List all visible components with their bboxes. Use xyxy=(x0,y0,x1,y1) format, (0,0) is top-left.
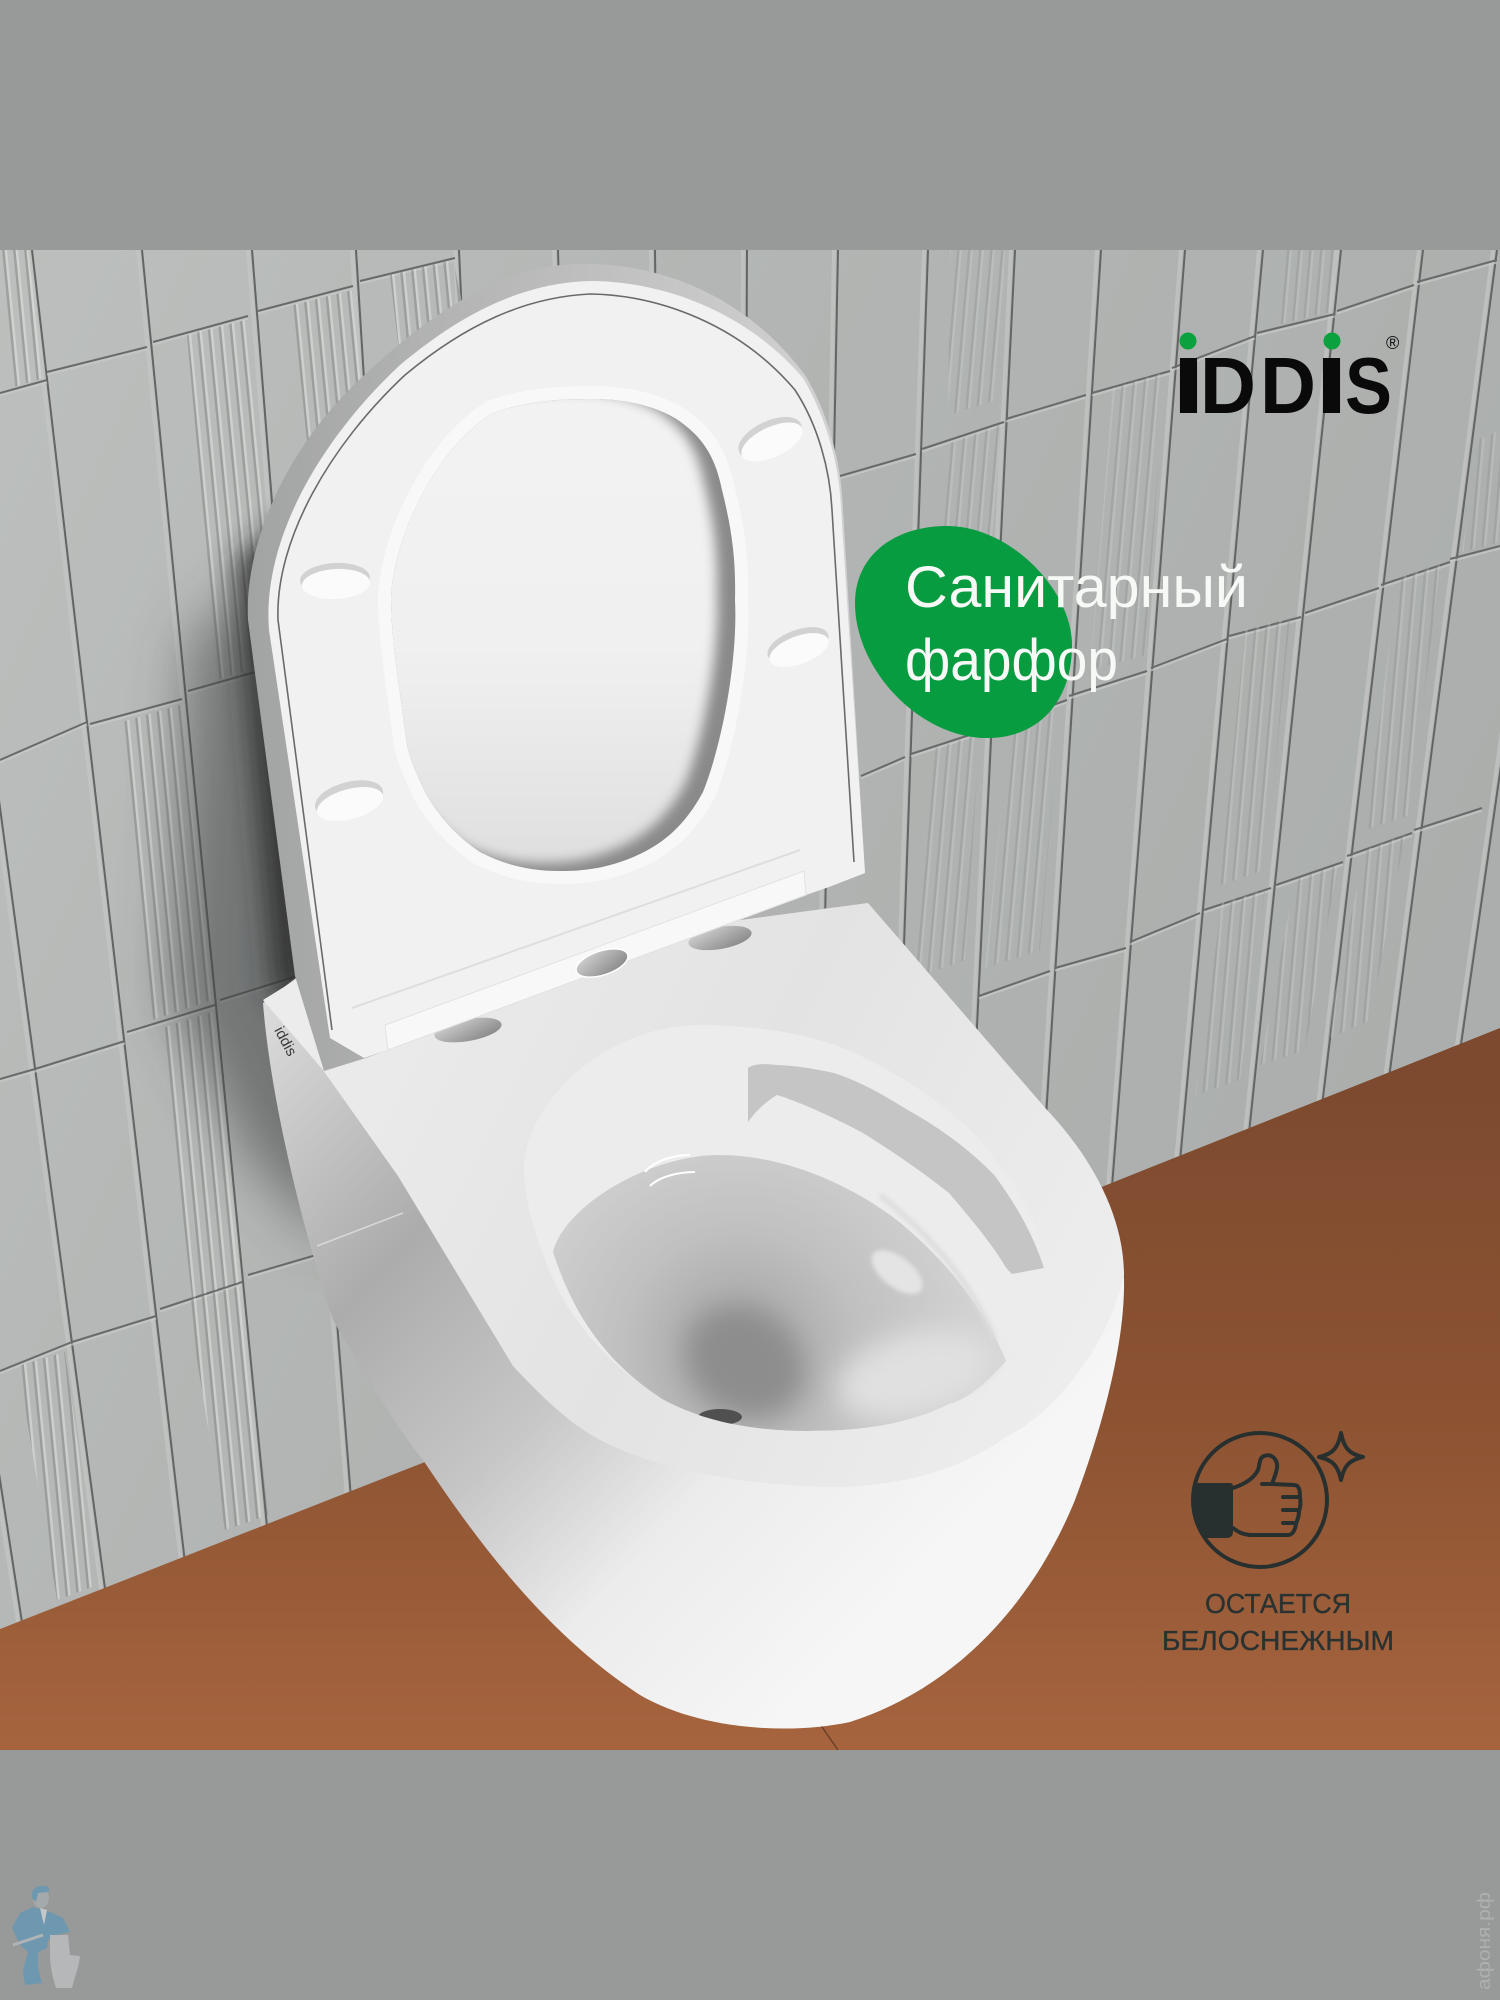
bumper lower left xyxy=(315,780,383,821)
lid recess edge xyxy=(352,850,800,1008)
chrome fixing post right xyxy=(688,926,752,950)
iddis mark on block: iddis xyxy=(270,1024,300,1059)
lid shadow on wall xyxy=(170,510,350,1250)
rinse ledge xyxy=(748,1064,1044,1274)
bumper top right xyxy=(738,417,802,462)
icon caption: БЕЛОСНЕЖНЫМ xyxy=(1162,1625,1394,1656)
watermark: site name: афоня.рф xyxy=(1474,1892,1494,1990)
product photo scene xyxy=(0,250,1500,1750)
icon: thumbs up with sparkle xyxy=(1190,1433,1363,1567)
inner basin xyxy=(553,1155,1006,1431)
floor xyxy=(0,1028,1500,1750)
lid outer shell xyxy=(248,264,865,1071)
icon caption xyxy=(1162,1588,1394,1656)
callout heading xyxy=(905,555,1248,693)
bottom grey band xyxy=(0,1750,1500,2000)
callout heading: Санитарный xyxy=(905,555,1248,620)
body side surface xyxy=(263,903,1124,1729)
toilet bowl body xyxy=(263,903,1124,1729)
callout heading: фарфор xyxy=(905,628,1118,693)
hinge strip xyxy=(385,871,806,1050)
top grey band xyxy=(0,0,1500,250)
icon caption: ОСТАЕТСЯ xyxy=(1205,1588,1351,1619)
seat opening xyxy=(391,399,736,871)
IDDIS logo: D xyxy=(1260,341,1316,430)
IDDIS logo: I xyxy=(1315,341,1348,430)
watermark: plumber with toilet xyxy=(12,1886,80,1988)
chrome fixing post left xyxy=(434,1018,502,1042)
green callout blob xyxy=(855,526,1072,738)
lid white face xyxy=(268,281,865,1058)
tiled wall xyxy=(0,250,1500,1700)
IDDIS logo: D xyxy=(1200,341,1256,430)
deck and rim top xyxy=(263,903,1124,1487)
bumper right xyxy=(768,627,828,666)
seat ring xyxy=(391,399,735,871)
drain xyxy=(698,1409,742,1425)
bowl opening xyxy=(553,1027,1044,1431)
IDDIS logo: I xyxy=(1172,341,1205,430)
IDDIS logo xyxy=(1172,332,1399,430)
IDDIS logo: S xyxy=(1345,341,1392,430)
chrome release button xyxy=(576,950,628,978)
raised seat lid xyxy=(248,264,865,1071)
IDDIS logo: ® xyxy=(1386,333,1399,353)
bumper upper left xyxy=(300,563,370,599)
